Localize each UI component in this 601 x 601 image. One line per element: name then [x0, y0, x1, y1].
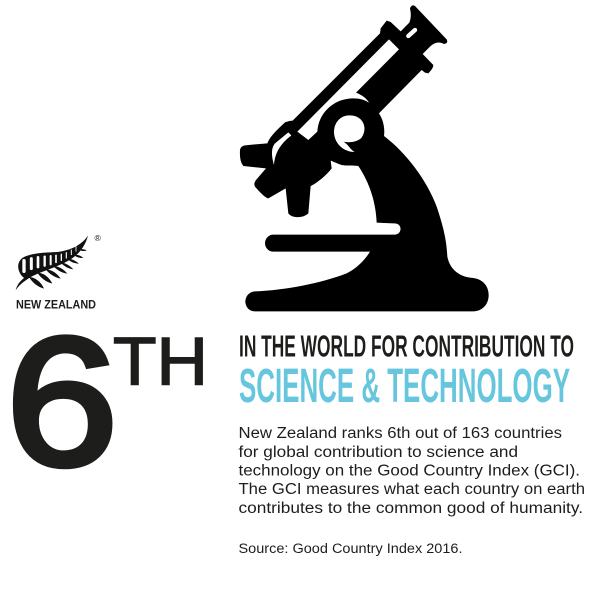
body text: New Zealand ranks 6th out of 163 countries — [238, 425, 562, 442]
big rank numeral: 6 — [6, 300, 118, 504]
body text: The GCI measures what each country on earth — [238, 481, 585, 498]
body text: technology on the Good Country Index (GCI). — [238, 462, 580, 480]
ordinal suffix: TH — [113, 324, 208, 400]
body text — [238, 425, 585, 517]
logo: New Zealand fern mark — [16, 233, 102, 312]
icon: silver fern — [16, 235, 88, 290]
registered mark: ® — [94, 233, 102, 243]
logo wordmark: NEW ZEALAND — [16, 300, 96, 312]
source note: Source: Good Country Index 2016. — [238, 541, 462, 556]
body text: for global contribution to science and — [238, 444, 518, 461]
body text: contributes to the common good of humanity. — [238, 500, 583, 517]
icon: microscope — [240, 5, 489, 311]
